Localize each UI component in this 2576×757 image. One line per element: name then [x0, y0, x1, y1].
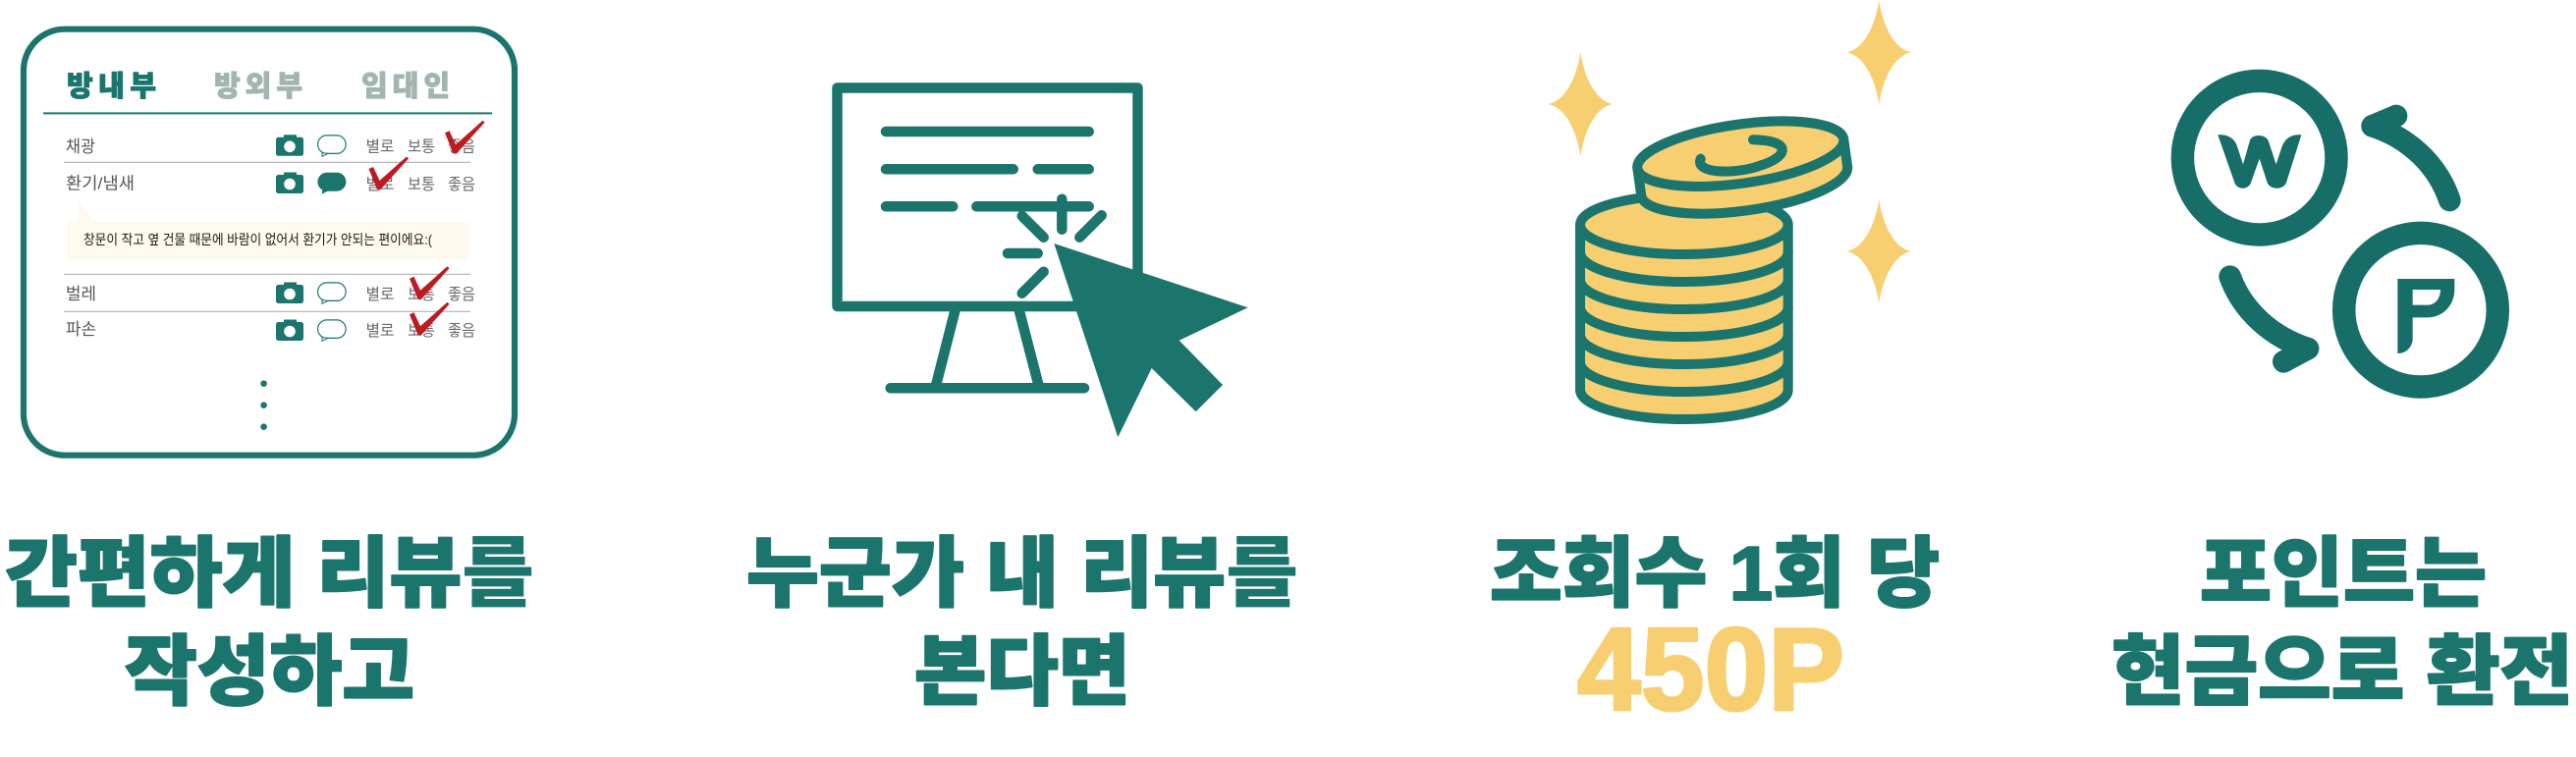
row: 환기/냄새: 환기/냄새: [66, 175, 135, 192]
row: 파손: [66, 302, 475, 341]
W coin: [2182, 81, 2336, 235]
sparkle left: [1548, 52, 1613, 156]
row: 벌레: 벌레: [66, 285, 96, 303]
heading: step 3: [1490, 530, 1940, 735]
row: 채광: [66, 121, 485, 156]
tab: 방외부: 방외부: [214, 71, 302, 102]
row: 채광: 좋음: [448, 137, 475, 155]
row: 파손: 파손: [66, 320, 96, 339]
panel: review form card: [24, 29, 515, 456]
monitor: [837, 88, 1137, 388]
filled comment bubble icon: [317, 173, 346, 194]
heading: step 2: [746, 530, 1298, 715]
highlight: 450P: 450P: [1577, 604, 1844, 735]
red check mark: [369, 157, 409, 190]
P coin: [2344, 233, 2497, 387]
arrow: P to W: [2373, 116, 2449, 200]
row: 파손: 좋음: [448, 322, 475, 340]
camera icon: [276, 283, 303, 303]
heading: step 1: 간편하게 리뷰를: [5, 530, 534, 617]
arrow: W to P: [2230, 277, 2308, 361]
row: 파손: 별로: [365, 322, 395, 340]
icon: coin stack with sparkles: [1548, 0, 1911, 419]
row: 환기/냄새: [66, 157, 475, 194]
camera icon: [276, 320, 303, 341]
row: 환기/냄새: 별로: [365, 176, 395, 193]
row: 벌레: 별로: [365, 286, 395, 303]
red check mark: [410, 302, 450, 336]
more dots: [260, 380, 267, 430]
comment callout: 창문이 작고 옆 건물 때문에 바람이 없어서 환기가 안되는 편이에요:(: [83, 232, 432, 247]
row: 환기/냄새: 좋음: [448, 176, 475, 193]
row: 채광: 채광: [66, 137, 95, 156]
cursor arrow: [1054, 243, 1248, 437]
icon: monitor with cursor: [837, 88, 1248, 437]
comment bubble icon: [318, 135, 346, 156]
tab: 임대인: 임대인: [361, 71, 450, 102]
coin stack: [1580, 195, 1788, 419]
heading: step 1: 작성하고: [125, 628, 414, 715]
row: 벌레: [66, 266, 475, 303]
heading: step 3: 조회수 1회 당: [1490, 530, 1940, 617]
sparkle lower right: [1846, 199, 1911, 303]
icon: W and P exchange: [2182, 81, 2497, 387]
red check mark: [445, 121, 485, 154]
comment bubble icon: [318, 283, 346, 303]
camera icon: [276, 173, 303, 193]
heading: step 2: 본다면: [914, 628, 1130, 715]
row: 채광: 보통: [408, 137, 435, 155]
heading: step 4: [2111, 530, 2573, 715]
sparkle top right: [1846, 0, 1911, 104]
comment bubble icon: [318, 320, 346, 341]
red check mark: [410, 266, 450, 299]
row: 벌레: 좋음: [448, 286, 475, 303]
tab: 방내부: 방내부: [67, 71, 156, 102]
heading: step 1: [5, 530, 534, 715]
comment callout: [67, 201, 470, 259]
camera icon: [276, 135, 303, 156]
heading: step 4: 현금으로 환전: [2111, 628, 2573, 715]
card outline: [24, 29, 515, 456]
heading: step 2: 누군가 내 리뷰를: [746, 530, 1298, 617]
tilted top coin: [1633, 110, 1851, 225]
heading: step 4: 포인트는: [2200, 530, 2487, 617]
row: 환기/냄새: 보통: [408, 176, 435, 193]
row: 채광: 별로: [365, 137, 395, 155]
row: 벌레: 보통: [408, 286, 435, 303]
row: 파손: 보통: [408, 322, 435, 340]
